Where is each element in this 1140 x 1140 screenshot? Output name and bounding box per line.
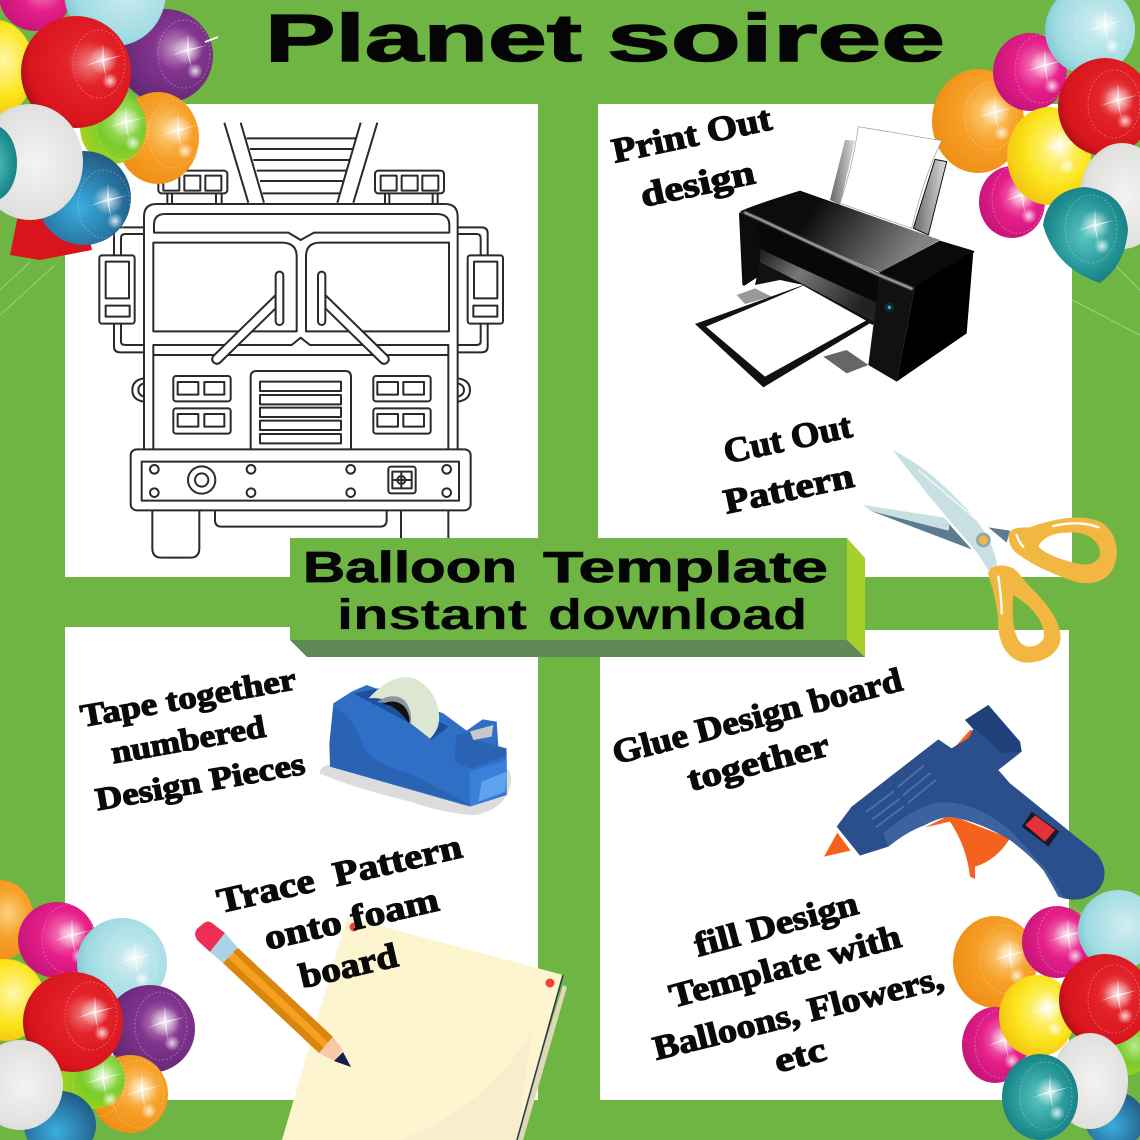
cab outline [144,204,458,449]
wipers [212,295,276,364]
text: trace pattern onto foam board: board [295,935,402,996]
text: cut out pattern [720,406,857,522]
banner: balloon template instant download: Template [543,543,828,592]
text: tape together numbered design pieces: Design Pieces [93,745,308,817]
visor [154,214,449,240]
tape dispenser icon [319,677,511,815]
balloons: top left [0,0,218,260]
banner: balloon template instant download [290,538,865,657]
text: tape together numbered design pieces: Tape together [78,661,299,734]
mirror arms [114,227,144,352]
panel: print and cut [598,104,1072,577]
text: print out design [608,99,775,215]
panel: tape and trace [65,627,538,1100]
panel: glue and fill [600,630,1069,1100]
title: soiree [607,1,945,76]
windshield panes [153,243,297,331]
roof lights [167,193,438,204]
text: tape together numbered design pieces: numbered [108,708,268,770]
text: glue design board together: together [684,727,833,799]
panel: fire truck template [65,104,538,577]
headlights [173,376,231,401]
fire truck line drawing [99,123,503,558]
title [265,1,945,76]
text: fill design template with balloons flowers etc: etc [770,1031,830,1080]
balloon strings [0,255,1140,335]
text: trace pattern onto foam board: Trace Pattern [213,827,466,921]
printer icon [695,127,973,387]
text: fill design template with balloons flowers etc: Template with [666,918,905,1016]
text: fill design template with balloons flowers etc: fill Design [690,885,862,964]
ladder [224,123,377,203]
banner: balloon template instant download: Balloon [303,543,517,592]
text: cut out pattern: Pattern [720,456,857,522]
text: glue design board together: Glue Design board [608,662,906,772]
title: Planet [265,1,582,76]
glue gun icon [824,705,1105,900]
text: glue design board together [608,662,906,799]
banner: balloon template instant download: download [548,591,807,639]
text: fill design template with balloons flowers etc [649,885,948,1080]
cab lower lines [153,338,448,449]
text: fill design template with balloons flowers etc: Balloons, Flowers, [649,960,948,1068]
text: tape together numbered design pieces [78,661,308,817]
text: trace pattern onto foam board: onto foam [260,880,443,958]
banner: balloon template instant download: instant [337,591,527,639]
grille [251,371,351,449]
text: print out design: design [637,153,758,215]
bumper [131,449,471,510]
mirrors [99,255,135,324]
text: trace pattern onto foam board [213,827,466,996]
side lamps [132,378,470,402]
scissors icon [863,450,1117,663]
balloons: bottom right [953,890,1140,1140]
pencil icon [195,922,351,1067]
paper sheet icon [282,917,567,1140]
text: print out design: Print Out [608,99,775,171]
balloons: top right [932,0,1140,283]
text: cut out pattern: Cut Out [720,406,856,471]
wheels [152,511,448,558]
balloons: bottom left [0,880,195,1140]
